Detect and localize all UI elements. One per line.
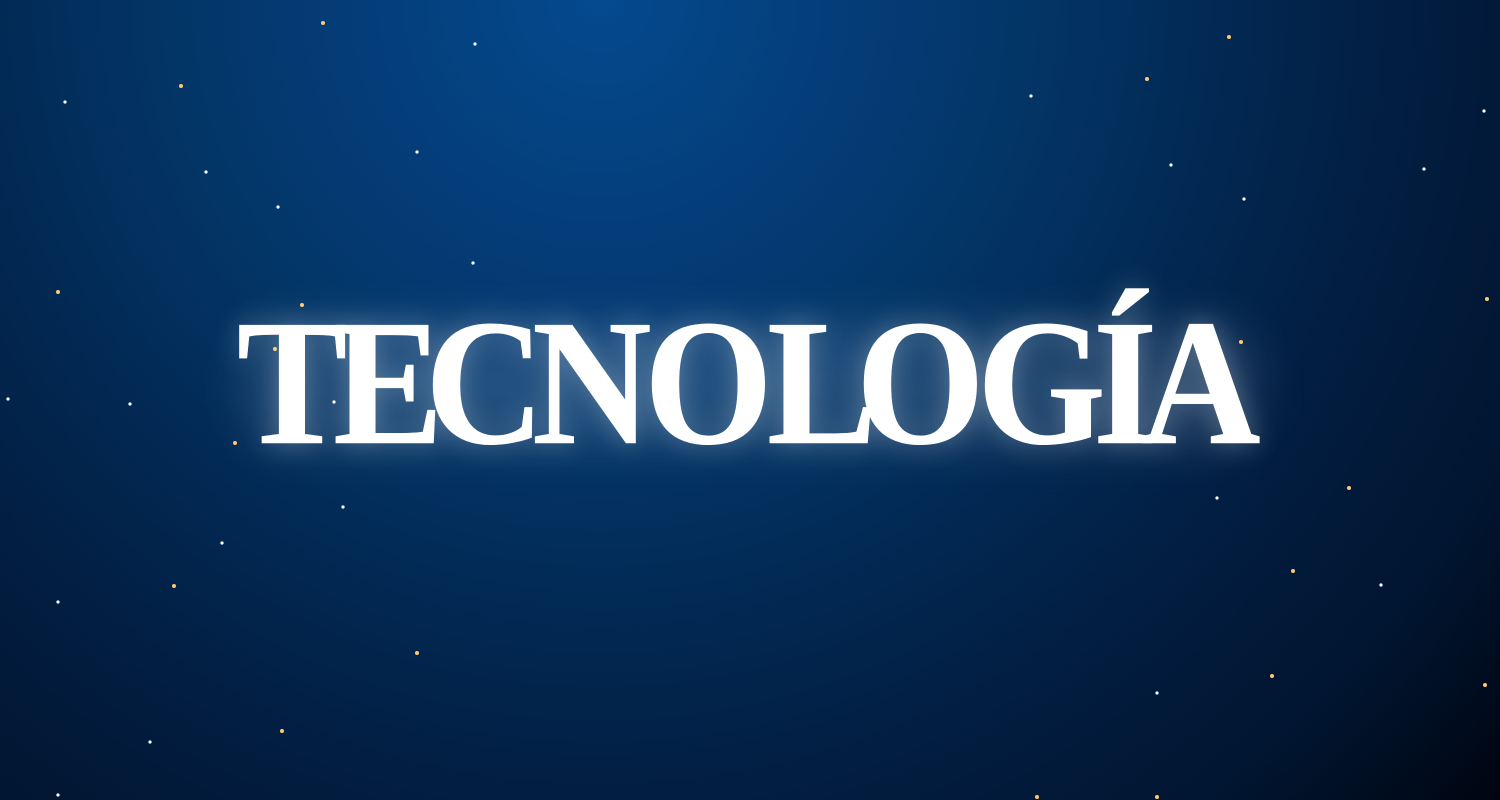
title glow [245,325,1255,445]
title: TECNOLOGÍA [237,284,1261,483]
